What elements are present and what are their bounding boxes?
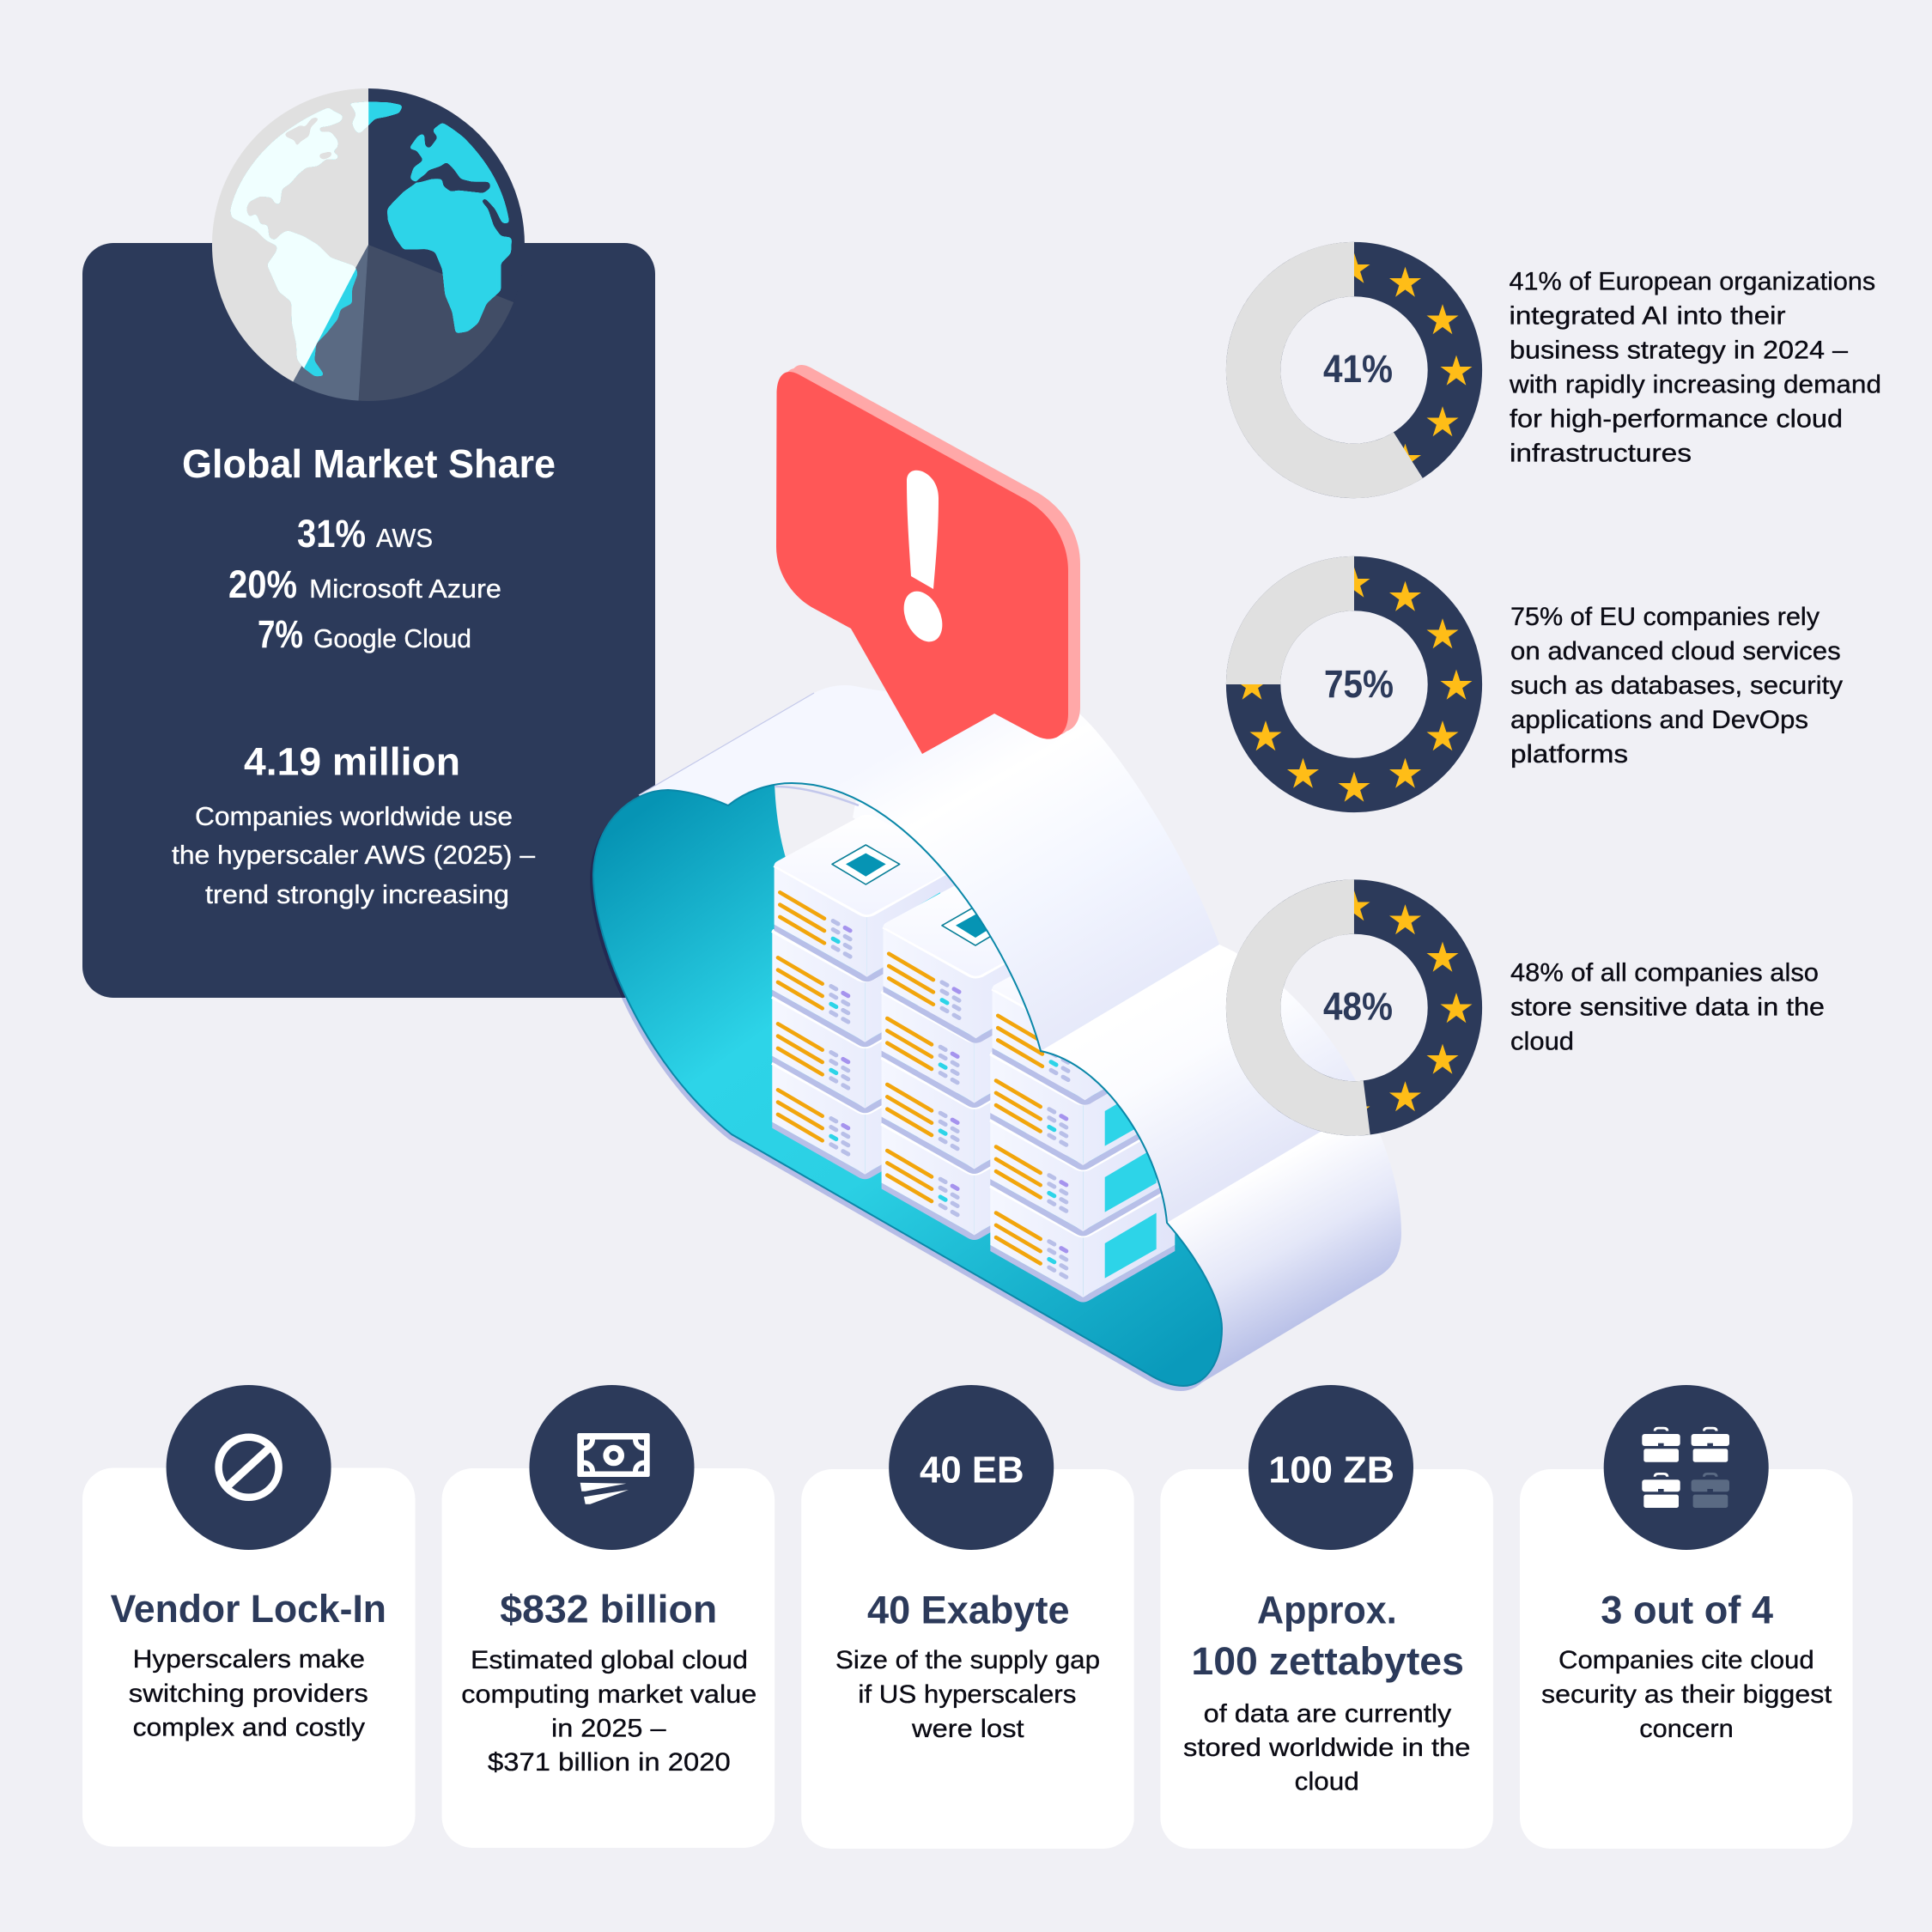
card text: Estimated global cloud (471, 1646, 748, 1674)
stat: AWS share (297, 512, 433, 556)
card heading: 40 Exabyte (867, 1589, 1070, 1632)
donut chart: 48%: 48% (1323, 985, 1393, 1029)
server column 2 (882, 876, 1068, 1240)
description: AWS usage: Companies worldwide use (195, 802, 513, 831)
cloud interior opening (775, 784, 856, 857)
bubble depth (782, 365, 1080, 750)
globe pie chart (212, 88, 525, 401)
card text: in 2025 – (551, 1714, 666, 1742)
badge: 100 ZB: 100 ZB (1268, 1449, 1394, 1491)
donut chart: 48% (1236, 890, 1472, 1125)
text: 75% EU companies: such as databases, security (1510, 671, 1843, 700)
stat: Google Cloud share: 7% (258, 612, 303, 656)
text: 41% European organizations: with rapidly increasing demand (1509, 371, 1881, 399)
text: 48% sensitive data: 48% of all companies also (1510, 958, 1819, 987)
card: vendor lock-in (82, 1385, 416, 1846)
panel: global market share (82, 88, 655, 998)
text: 75% EU companies: platforms (1510, 740, 1628, 769)
cloud body middle section (1041, 945, 1367, 1223)
text: 41% European organizations: 41% of European organizations (1510, 268, 1875, 296)
stat: Azure share (228, 562, 501, 606)
server column 3 (989, 975, 1175, 1302)
card text: if US hyperscalers (858, 1680, 1076, 1709)
cloud front face (593, 783, 1222, 1386)
illustration: isometric cloud with servers (590, 685, 1401, 1391)
text: 48% sensitive data: store sensitive data in the (1510, 993, 1825, 1022)
card text: of data are currently (1204, 1699, 1451, 1728)
card heading (1191, 1589, 1464, 1683)
text: 41% European organizations (1509, 268, 1881, 468)
text: 41% European organizations: business strategy in 2024 – (1510, 337, 1849, 365)
heading: global market share: Global Market Share (182, 441, 556, 486)
text: 75% EU companies (1510, 603, 1843, 769)
card text (461, 1646, 756, 1777)
card text: computing market value (461, 1680, 756, 1709)
cloud shadow over panel (590, 827, 625, 998)
card text (1183, 1699, 1470, 1796)
card text (129, 1645, 368, 1741)
card text (1541, 1646, 1832, 1743)
exclamation mark (896, 471, 950, 648)
card text: were lost (911, 1715, 1024, 1743)
cloud body upper bump (639, 685, 1219, 1051)
donut chart: 41%: 41% (1323, 347, 1393, 391)
donut chart: 75% (1236, 568, 1472, 802)
text: 48% sensitive data: cloud (1510, 1027, 1574, 1056)
card: market value (442, 1385, 775, 1848)
server column 1 (772, 815, 959, 1179)
card text: Companies cite cloud (1558, 1646, 1814, 1674)
text: 41% European organizations: for high-performance cloud (1510, 405, 1843, 434)
card: 3 out of 4 (1520, 1385, 1853, 1849)
stat: Azure share: Microsoft Azure (309, 574, 501, 604)
stat: AWS share: AWS (376, 523, 433, 553)
card text: stored worldwide in the (1183, 1734, 1470, 1762)
card heading: 100 zettabytes (1191, 1639, 1464, 1683)
card heading: 3 out of 4 (1601, 1589, 1773, 1632)
card text: Hyperscalers make (133, 1645, 365, 1674)
stat: 4.19 million: 4.19 million (244, 740, 460, 783)
card text: $371 billion in 2020 (488, 1748, 731, 1777)
text: 75% EU companies: 75% of EU companies rely (1510, 603, 1820, 631)
card text: switching providers (129, 1680, 368, 1708)
interior white wall behind lid (853, 800, 908, 835)
card: 40 exabyte (801, 1385, 1134, 1849)
card heading: Vendor Lock-In (111, 1587, 386, 1631)
card text: concern (1639, 1715, 1734, 1743)
description: AWS usage: the hyperscaler AWS (2025) – (172, 841, 535, 870)
panel background (82, 243, 655, 998)
card text (835, 1646, 1100, 1743)
alert speech bubble (776, 365, 1080, 754)
text: 41% European organizations: infrastructures (1510, 440, 1692, 468)
cloud outline (593, 783, 1222, 1386)
badge: 100 ZB (1249, 1385, 1413, 1550)
icon: banknotes (529, 1385, 694, 1550)
card text: complex and costly (133, 1713, 365, 1741)
card heading: Approx. (1257, 1589, 1397, 1632)
card text: Size of the supply gap (835, 1646, 1100, 1674)
stat: Google Cloud share (258, 612, 471, 656)
server racks (772, 773, 1176, 1302)
donut chart: 75%: 75% (1324, 662, 1394, 706)
text: 75% EU companies: applications and DevOps (1510, 706, 1808, 734)
stat: Azure share: 20% (228, 562, 297, 606)
text: 75% EU companies: on advanced cloud services (1510, 637, 1841, 665)
stat: AWS share: 31% (297, 512, 366, 556)
badge: 40 EB (889, 1385, 1054, 1550)
card text: security as their biggest (1541, 1680, 1832, 1709)
donut chart: 41% (1215, 231, 1493, 509)
description: AWS usage (172, 802, 535, 909)
inner rim of opening (775, 787, 859, 805)
description: AWS usage: trend strongly increasing (205, 880, 509, 909)
cloud body lower section (1116, 1104, 1401, 1386)
icon: prohibited sign (167, 1385, 331, 1550)
card heading: $832 billion (500, 1587, 717, 1631)
cloud top edge line (639, 693, 814, 795)
cloud shadow edge (591, 795, 1219, 1391)
badge: 40 EB: 40 EB (920, 1449, 1024, 1491)
stat: Google Cloud share: Google Cloud (313, 623, 471, 653)
card text: cloud (1295, 1768, 1359, 1796)
text: 48% sensitive data (1510, 958, 1825, 1056)
icon: briefcases (1604, 1385, 1769, 1550)
card: 100 zettabytes (1160, 1385, 1493, 1849)
text: 41% European organizations: integrated AI into their (1510, 302, 1786, 331)
bubble face (776, 372, 1068, 754)
